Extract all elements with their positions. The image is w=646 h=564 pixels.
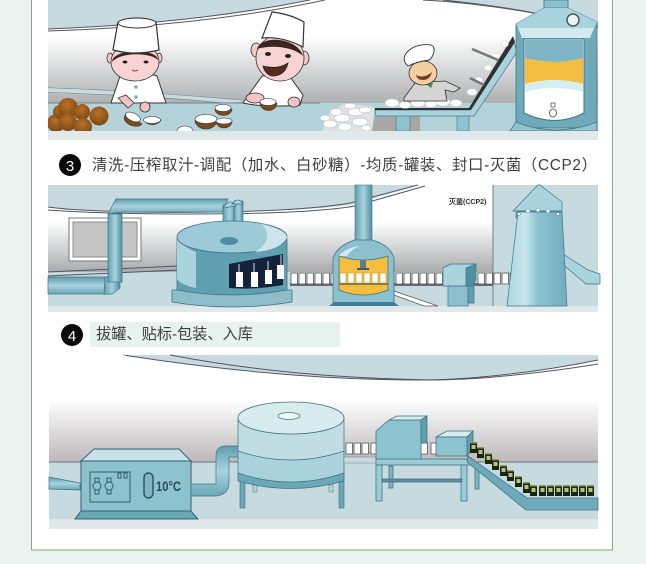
- step 3 number badge: [59, 154, 81, 176]
- thermometer readout: 10°C: [156, 478, 181, 494]
- mixing tank: [510, 0, 597, 131]
- inlet pipe: [49, 477, 80, 490]
- back wall: [49, 355, 598, 462]
- control panel: [90, 472, 130, 502]
- coconut halves: [124, 98, 278, 131]
- conveyor with peeled coconut pile: [320, 36, 517, 131]
- ceiling: [48, 0, 598, 29]
- step 4 heading band: [90, 322, 340, 347]
- coconuts: [48, 98, 108, 131]
- panel 1 floor strip: [48, 131, 598, 140]
- round tank: [238, 402, 344, 508]
- step 3 heading: 清洗-压榨取汁-调配（加水、白砂糖）-均质-罐装、封口-灭菌（CCP2）: [92, 156, 597, 174]
- chef left: [107, 18, 166, 112]
- packed can conveyor: [467, 442, 598, 510]
- jar conveyor: [290, 273, 516, 306]
- right room section: [493, 185, 598, 306]
- panel: step 4 labelling and packing illustration: [49, 355, 598, 529]
- connecting pipe: [191, 446, 240, 496]
- back wall: [48, 185, 493, 272]
- floor: [49, 462, 598, 519]
- panel: step 3 coconut preparation illustration: [47, 0, 598, 136]
- labelling machine: [376, 416, 479, 501]
- step 4 number badge: 4: [68, 328, 76, 345]
- filling carousel: [172, 221, 292, 307]
- window: [69, 218, 141, 261]
- sealing tank: [329, 185, 399, 306]
- capping machine: [443, 264, 476, 306]
- panel: step 3 filling and sterilising illustration: [48, 185, 600, 312]
- sterilisation label: 灭菌(CCP2): [449, 197, 486, 206]
- floor strip: [49, 519, 598, 529]
- wall rail: [48, 88, 250, 103]
- table: [48, 103, 598, 131]
- ceiling: [48, 185, 420, 212]
- floor strip: [48, 306, 598, 312]
- small chef: [404, 45, 460, 101]
- chef right: [243, 12, 309, 107]
- step 4 heading: 拔罐、贴标-包装、入库: [96, 326, 253, 343]
- step 3 number badge: 3: [66, 158, 74, 175]
- jars before labeller: [344, 443, 438, 463]
- step 4 number badge: [61, 324, 83, 346]
- ceiling: [125, 355, 598, 380]
- chiller unit: [75, 449, 198, 519]
- ductwork: [48, 199, 243, 294]
- sterilising tower: [507, 185, 600, 306]
- back wall: [48, 43, 598, 103]
- floor: [48, 272, 493, 306]
